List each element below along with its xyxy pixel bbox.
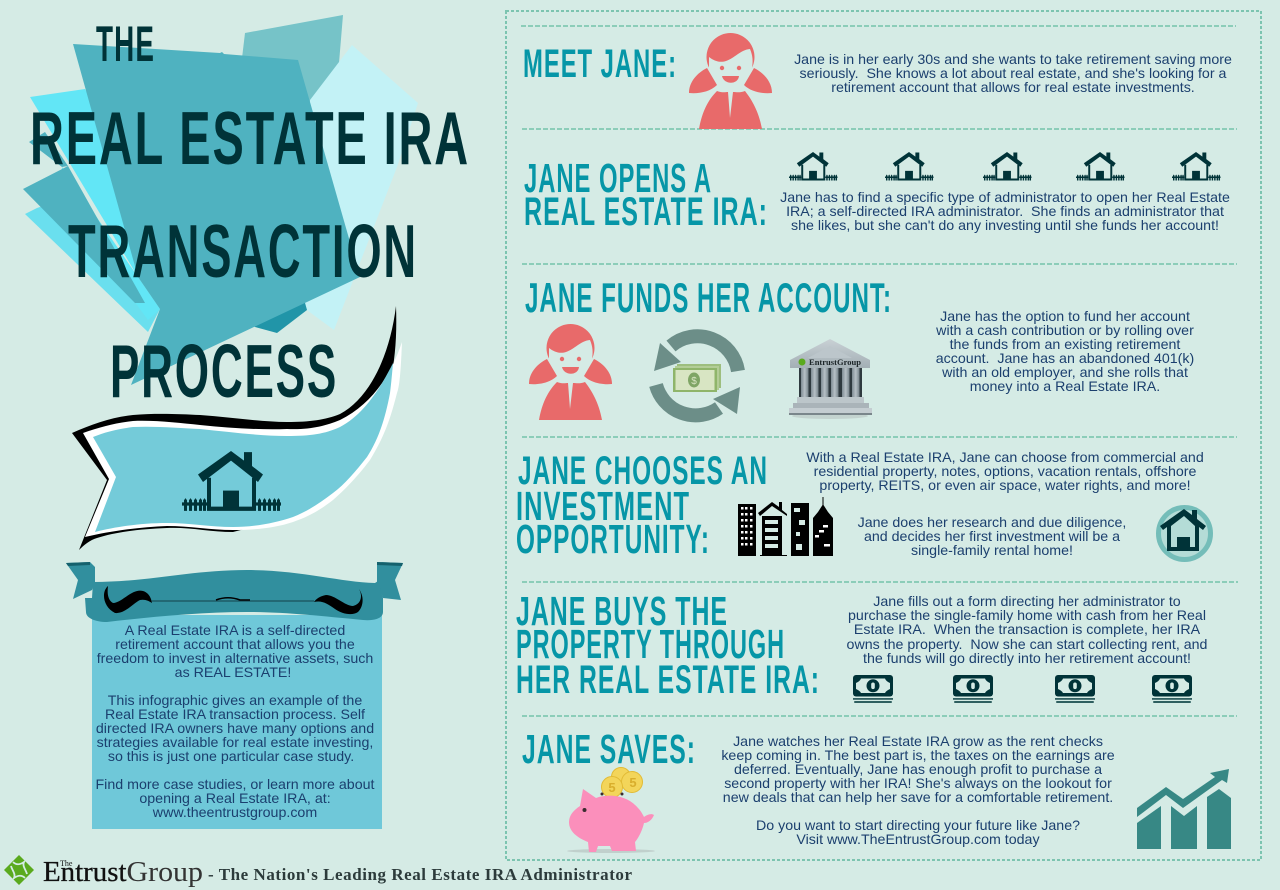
intro text: This infographic gives an example of the [108, 693, 362, 709]
heading [516, 588, 820, 702]
icon: cash: $ [691, 376, 697, 387]
coins: 5 [608, 780, 616, 795]
body text: IRA; a self-directed IRA administrator. She finds an administrator that [786, 204, 1224, 220]
panel: introduction [66, 562, 403, 829]
section: buys property [516, 588, 1207, 703]
body text: the funds from an existing retirement [950, 337, 1180, 353]
icon: bank [789, 339, 872, 419]
body text: Visit www.TheEntrustGroup.com today [796, 832, 1040, 848]
body text: Jane has to find a specific type of administrator to open her Real Estate [780, 190, 1230, 206]
logo small the: The [60, 859, 73, 868]
body text: second property with her IRA! She's always on the lookout for [724, 776, 1112, 792]
coins: 5 [629, 775, 637, 790]
body text: she likes, but she can't do any investing until she funds her account! [791, 218, 1219, 234]
body text bottom: and decides her first investment will be a [864, 529, 1120, 545]
coins [602, 768, 642, 798]
intro text: Find more case studies, or learn more about [96, 777, 375, 793]
heading: JANE SAVES: [522, 726, 696, 772]
panel frame [506, 11, 1261, 860]
icon: city skyline [738, 497, 833, 556]
intro text: retirement account that allows you the [115, 637, 355, 653]
body text: owns the property. Now she can start collecting rent, and [847, 637, 1207, 653]
body text: Do you want to start directing your future like Jane? [756, 818, 1080, 834]
flourish [104, 586, 363, 614]
section: opens IRA [524, 152, 1230, 234]
body text: deferred. Eventually, Jane has enough profit to purchase a [734, 762, 1102, 778]
intro text: directed IRA owners have many options and [96, 721, 374, 737]
section: funds account [525, 274, 1194, 420]
panel: title graphic [23, 15, 470, 550]
intro text: A Real Estate IRA is a self-directed [125, 623, 345, 639]
body text top [806, 450, 1204, 494]
heading: JANE FUNDS HER ACCOUNT: [525, 274, 892, 321]
section: chooses investment [516, 449, 1210, 562]
icon: Jane [689, 33, 772, 129]
heading: JANE OPENS A [524, 155, 712, 201]
icon: rollover arrows [654, 336, 740, 415]
decorative shards [23, 15, 418, 385]
body text bottom [858, 515, 1126, 559]
body text: purchase the single-family home with cash from her Real [848, 608, 1206, 624]
heading: OPPORTUNITY: [516, 516, 710, 562]
icons: cash stacks [853, 675, 1192, 703]
intro text: freedom to invest in alternative assets, such [97, 651, 373, 667]
dividers [521, 26, 1238, 716]
body text: new deals that can help her save for a comfortable retirement. [723, 790, 1113, 806]
heading [516, 449, 768, 562]
body text [935, 309, 1194, 395]
body text: with an old employer, and she rolls that [941, 365, 1188, 381]
body text: the funds will go directly into her retirement account! [863, 651, 1191, 667]
icon: piggy bank [567, 768, 655, 853]
title text [30, 16, 470, 413]
icon: growth chart [1137, 769, 1231, 849]
intro text: opening a Real Estate IRA, at: [139, 791, 331, 807]
section: meet Jane [523, 33, 1232, 129]
body text: Jane has the option to fund her account [940, 309, 1190, 325]
body text: account. Jane has an abandoned 401(k) [936, 351, 1194, 367]
body text: retirement account that allows for real estate investments. [831, 80, 1195, 96]
body text: keep coming in. The best part is, the taxes on the earnings are [721, 748, 1115, 764]
body text [780, 190, 1230, 234]
heading: INVESTMENT [516, 483, 690, 529]
bank logo [798, 358, 806, 366]
icon: cash [673, 364, 721, 392]
body text: Jane fills out a form directing her administrator to [873, 594, 1181, 610]
icons: houses [789, 152, 1221, 181]
body text [847, 594, 1207, 667]
heading: MEET JANE: [523, 42, 677, 86]
panel: steps [506, 11, 1261, 860]
intro text [96, 623, 375, 821]
body text: with a cash contribution or by rolling over [935, 323, 1194, 339]
heading: REAL ESTATE IRA: [524, 190, 768, 234]
heading: JANE BUYS THE [516, 588, 728, 634]
body text bottom: single-family rental home! [911, 543, 1073, 559]
body text: Estate IRA. When the transaction is complete, her IRA [854, 622, 1201, 638]
intro text: as REAL ESTATE! [175, 665, 291, 681]
title text: TRANSACTION [68, 209, 418, 293]
section: saves [522, 726, 1231, 853]
heading: JANE CHOOSES AN [518, 449, 768, 493]
bank label: EntrustGroup [809, 357, 861, 367]
intro text: strategies available for real estate investing, [97, 735, 373, 751]
icon: house in circle [1158, 508, 1210, 560]
body text: seriously. She knows a lot about real estate, and she's looking for a [800, 66, 1227, 82]
footer [4, 855, 632, 888]
body text: Jane is in her early 30s and she wants to take retirement saving more [794, 52, 1232, 68]
heading: HER REAL ESTATE IRA: [516, 658, 820, 702]
body text: Jane watches her Real Estate IRA grow as the rent checks [733, 734, 1103, 750]
tagline: - The Nation's Leading Real Estate IRA Administrator [208, 865, 632, 884]
intro box [92, 615, 382, 829]
intro text: so this is just one particular case study. [108, 749, 354, 765]
intro text: www.theentrustgroup.com [152, 805, 317, 821]
body text bottom: Jane does her research and due diligence, [858, 515, 1126, 531]
body text [794, 52, 1232, 96]
icon: Jane [529, 324, 612, 420]
logo wordmark: EntrustGroup [43, 856, 203, 888]
scroll banner [66, 562, 403, 622]
icon: house [182, 451, 281, 511]
icon: Entrust logo [4, 855, 34, 885]
title text: THE [96, 16, 155, 72]
body text [721, 734, 1115, 848]
heading [524, 155, 768, 234]
bank pillars [799, 368, 862, 397]
body text top: residential property, notes, options, vacation rentals, offshore [814, 464, 1196, 480]
intro text: Real Estate IRA transaction process. Self [105, 707, 365, 723]
title text: PROCESS [110, 329, 338, 413]
title text: REAL ESTATE IRA [30, 96, 470, 180]
heading: PROPERTY THROUGH [516, 621, 785, 667]
body text top: With a Real Estate IRA, Jane can choose from commercial and [806, 450, 1204, 466]
body text: money into a Real Estate IRA. [970, 379, 1160, 395]
ribbon [72, 306, 402, 550]
body text top: property, REITS, or even air space, water rights, and more! [819, 478, 1191, 494]
